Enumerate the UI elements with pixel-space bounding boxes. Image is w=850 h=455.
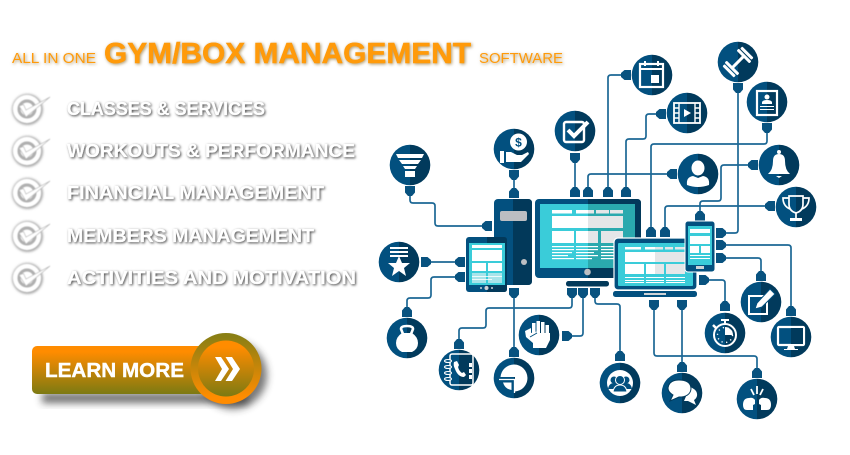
icon: checkbox: [555, 111, 595, 151]
device: phone: [685, 221, 715, 272]
list item: members management: [12, 221, 315, 252]
icon: group: [600, 363, 640, 403]
icon: id card: [747, 82, 787, 122]
device: desktop monitor: [535, 199, 641, 286]
button: learn more: LEARN MORE: [45, 360, 184, 382]
icon: film strip: [667, 93, 707, 133]
list item: financial management: [12, 178, 325, 209]
list item: members management: MEMBERS MANAGEMENT: [67, 225, 315, 246]
connector wires: [407, 75, 791, 371]
list item: classes and services: [12, 94, 265, 125]
button: learn more: [32, 333, 267, 409]
list item: financial management: FINANCIAL MANAGEMENT: [67, 182, 325, 203]
title: ALL IN ONE: [12, 50, 96, 67]
list item: classes and services: CLASSES & SERVICES: [67, 98, 265, 119]
icon: calendar: [632, 55, 672, 95]
connector plugs: [402, 70, 796, 378]
list item: workouts and performance: [12, 136, 355, 167]
device: tablet: [466, 237, 507, 292]
title: GYM/BOX MANAGEMENT: [104, 38, 471, 70]
icon: chat bubbles: [662, 373, 702, 413]
device: laptop: [613, 238, 697, 297]
icon: pie sheet: [494, 358, 534, 398]
icon: person: [678, 154, 718, 194]
icon: dollar in hand: $: [515, 136, 522, 150]
list item: workouts and performance: WORKOUTS & PERFORMANCE: [67, 140, 355, 161]
icon: phone book: [439, 350, 479, 390]
icon: funnel: [390, 145, 430, 185]
icon: dumbbell: [718, 42, 758, 82]
icon: star note: [379, 242, 419, 282]
list item: activities and motivation: ACTIVITIES AND MOTIVATION: [67, 267, 356, 288]
icon: trophy: [776, 187, 816, 227]
title: SOFTWARE: [479, 50, 563, 67]
icon: dollar in hand: [494, 129, 534, 169]
icon: pencil note: [741, 282, 781, 322]
icon: kettlebell: [387, 318, 427, 358]
device: tower computer: [494, 199, 532, 285]
icon: computer monitor: [771, 317, 811, 357]
icon: fist: [519, 315, 559, 355]
title: [12, 38, 563, 70]
icon: bell: [759, 145, 799, 185]
icon: boxing gloves: [737, 379, 777, 419]
icon: stopwatch: [705, 313, 745, 353]
feature list: [12, 94, 356, 294]
list item: activities and motivation: [12, 263, 356, 294]
